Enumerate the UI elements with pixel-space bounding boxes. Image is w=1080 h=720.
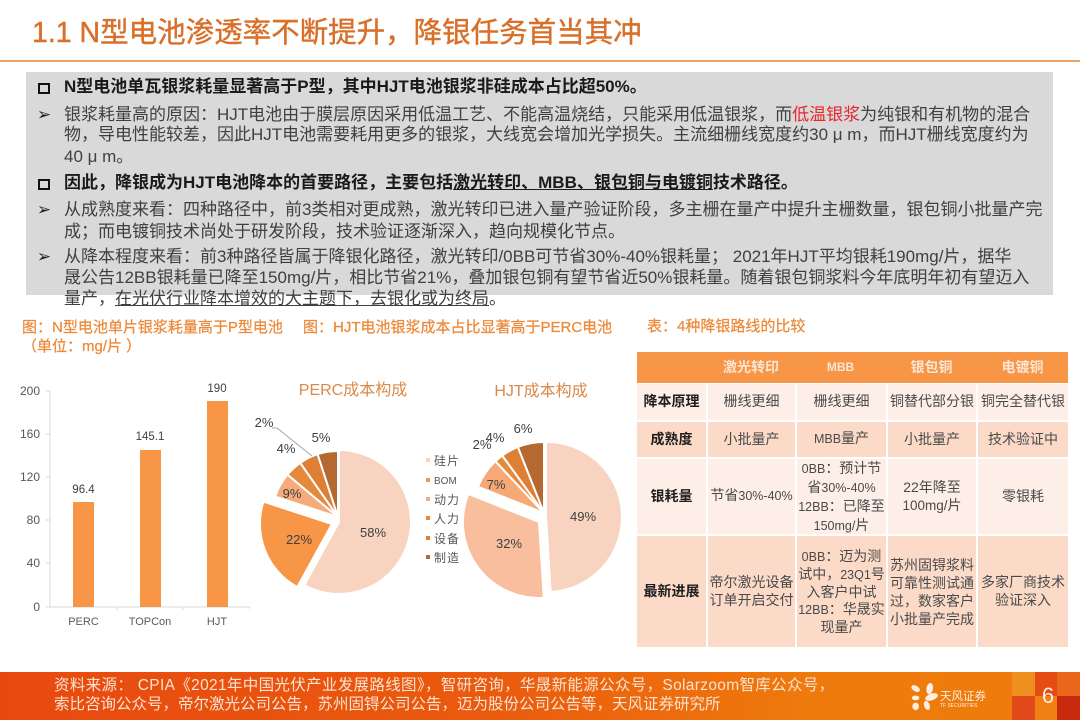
row: maturity: MBB量产: [814, 430, 869, 446]
footer source text: [54, 676, 834, 712]
row: maturity: 小批量产: [724, 431, 780, 447]
bar chart: silver paste per cell: 80: [27, 513, 40, 527]
pie legend: 动力: [434, 493, 460, 507]
key points text: 从成熟度来看：四种路径中，前3类相对更成熟，激光转印已进入量产验证阶段，多主栅在量产中提升主栅数量，银包铜小批量产完: [64, 200, 1042, 219]
row: latest progress: 帝尔激光设备: [710, 574, 794, 590]
footer band: [0, 672, 1080, 720]
bar chart: silver paste per cell: 120: [20, 470, 40, 484]
key points text: 银浆耗量高的原因：HJT电池由于膜层原因采用低温工艺、不能高温烧结，只能采用低温银浆，而低温银浆为纯银和有机物的混合: [64, 105, 1030, 124]
pie chart: PERC cost structure: 22%: [286, 532, 312, 547]
row: silver consumption: 22年降至: [903, 479, 961, 495]
pie chart: PERC cost structure: 5%: [312, 430, 331, 445]
key points text: ➢: [37, 200, 51, 219]
bar chart: silver paste per cell: 160: [20, 427, 40, 441]
bar chart: silver paste per cell: 190: [207, 383, 227, 395]
pie chart: HJT cost structure: 2%: [473, 437, 492, 452]
table header: [637, 352, 1068, 383]
title rule: [0, 60, 1080, 62]
logo: TF Securities: [911, 683, 986, 710]
row: maturity: 成熟度: [650, 431, 692, 447]
pie chart: PERC cost structure: 2%: [255, 415, 274, 430]
footer colour blocks: [1012, 672, 1080, 720]
caption: silver paste consumption: [22, 319, 283, 355]
row: silver consumption: 节省30%-40%: [710, 487, 793, 503]
caption: silver paste consumption: （单位：mg/片 ）: [22, 338, 141, 355]
row: principle: 栅线更细: [814, 393, 870, 409]
pie chart: HJT cost structure: HJT成本构成: [494, 382, 588, 400]
logo: TF Securities: 天风证券: [940, 691, 986, 703]
bar chart: silver paste per cell: 145.1: [136, 431, 164, 443]
bar chart: silver paste per cell: 96.4: [72, 484, 95, 496]
pie chart: HJT cost structure: 6%: [514, 421, 533, 436]
row: silver consumption: 12BB：已降至: [798, 498, 885, 514]
row: latest progress: 过，数家客户: [890, 592, 974, 608]
row: silver consumption: 零银耗: [1002, 488, 1044, 504]
caption: comparison table: 表：4种降银路线的比较: [647, 318, 805, 335]
row: principle: [637, 384, 1068, 420]
bar chart: silver paste per cell: [20, 383, 250, 628]
row: silver consumption: [637, 459, 1068, 534]
row: silver consumption: 0BB：预计节: [802, 460, 881, 476]
row: silver consumption: 150mg/片: [814, 516, 869, 532]
bar chart: silver paste per cell: TOPCon: [129, 616, 171, 628]
bar chart: silver paste per cell: HJT: [207, 616, 227, 628]
row: maturity: [637, 422, 1068, 457]
key points text: 晟公告12BB银耗量已降至150mg/片，相比节省21%，叠加银包铜有望节省近50%银耗量。随着银包铜浆料今年底明年初有望迈入: [64, 268, 1029, 287]
panel: key points: [26, 72, 1053, 295]
pie chart: HJT cost structure: [464, 382, 621, 597]
pie legend: 人力: [434, 512, 460, 526]
key points text: 因此，降银成为HJT电池降本的首要路径，主要包括激光转印、MBB、银包铜与电镀铜技术路径。: [64, 173, 798, 192]
pie chart: HJT cost structure: 7%: [487, 477, 506, 492]
row: latest progress: [637, 536, 1068, 647]
row: latest progress: 订单开启交付: [710, 592, 794, 608]
row: latest progress: 可靠性测试通: [890, 574, 974, 590]
pie legend: 硅片: [434, 454, 460, 468]
row: silver consumption: 省30%-40%: [807, 478, 876, 494]
key points text: ➢: [37, 247, 51, 266]
pie legend: [426, 454, 460, 565]
pie chart: PERC cost structure: [255, 381, 410, 593]
footer source text: 资料来源： CPIA《2021年中国光伏产业发展路线图》，智研咨询，华晟新能源公众号，Solarzoom智库公众号，: [54, 677, 834, 694]
row: latest progress: 12BB：华晟实: [798, 600, 885, 616]
page number: 6: [1042, 683, 1054, 708]
row: latest progress: 小批量产完成: [890, 610, 974, 626]
pie legend: 设备: [434, 532, 460, 546]
row: latest progress: 多家厂商技术: [981, 574, 1065, 590]
key points text: ➢: [37, 105, 51, 124]
row: latest progress: 验证深入: [995, 592, 1051, 608]
pie legend: 制造: [434, 551, 460, 565]
row: principle: 降本原理: [644, 393, 700, 409]
pie chart: PERC cost structure: PERC成本构成: [299, 381, 407, 399]
row: latest progress: 现量产: [820, 618, 862, 634]
table header: MBB: [827, 360, 854, 374]
table header: 银包铜: [910, 359, 952, 375]
row: latest progress: 最新进展: [644, 583, 700, 599]
table header: 激光转印: [723, 359, 779, 375]
pie legend: BOM: [434, 476, 457, 487]
bar chart: silver paste per cell: 40: [27, 556, 40, 570]
row: principle: 栅线更细: [724, 393, 780, 409]
key points text: [37, 77, 1042, 308]
pie chart: HJT cost structure: 4%: [486, 430, 505, 445]
key points text: 物，导电性能较差，因此HJT电池需要耗用更多的银浆，大线宽会增加光学损失。主流细栅线宽度约30 μ m，而HJT栅线宽度约为: [64, 125, 1029, 144]
bar chart: silver paste per cell: 0: [33, 600, 40, 614]
bar chart: silver paste per cell: PERC: [68, 616, 99, 628]
logo: TF Securities: TF SECURITIES: [940, 703, 978, 709]
table header: 电镀铜: [1002, 359, 1044, 375]
row: maturity: 技术验证中: [988, 431, 1058, 447]
footer source text: 索比咨询公众号，帝尔激光公司公告，苏州固锝公司公告，迈为股份公司公告等，天风证券研究所: [54, 696, 721, 712]
title: 1.1 N型电池渗透率不断提升，降银任务首当其冲: [32, 17, 642, 49]
pie chart: PERC cost structure: 9%: [283, 486, 302, 501]
pie chart: HJT cost structure: 49%: [570, 509, 596, 524]
row: latest progress: 入客户中试: [806, 584, 876, 600]
table: comparison of 4 silver reduction routes: [637, 352, 1068, 647]
row: principle: 铜完全替代银: [981, 393, 1065, 409]
bar chart: silver paste per cell: 200: [20, 384, 40, 398]
pie chart: PERC cost structure: 58%: [360, 525, 386, 540]
row: latest progress: 苏州固锝浆料: [890, 556, 974, 572]
row: latest progress: 试中，23Q1号: [798, 566, 885, 582]
row: maturity: 小批量产: [904, 431, 960, 447]
key points text: 成；而电镀铜技术尚处于研发阶段，技术验证逐渐深入，趋向规模化节点。: [64, 222, 625, 241]
pie chart: PERC cost structure: 4%: [277, 441, 296, 456]
key points text: N型电池单瓦银浆耗量显著高于P型，其中HJT电池银浆非硅成本占比超50%。: [64, 77, 647, 96]
caption: silver paste consumption: 图：N型电池单片银浆耗量高于P型电池: [22, 319, 283, 336]
caption: silver paste cost share: 图：HJT电池银浆成本占比显著高于PERC电池: [303, 319, 612, 336]
key points text: 量产，在光伏行业降本增效的大主题下，去银化或为终局。: [64, 289, 506, 308]
row: silver consumption: 银耗量: [650, 488, 692, 504]
row: latest progress: 0BB：迈为测: [802, 548, 881, 564]
row: principle: 铜替代部分银: [890, 393, 974, 409]
key points text: 从降本程度来看：前3种路径皆属于降银化路径，激光转印/0BB可节省30%-40%银耗量； 2021年HJT平均银耗190mg/片，据华: [64, 247, 1011, 266]
key points text: 40 μ m。: [64, 147, 133, 166]
row: silver consumption: 100mg/片: [902, 496, 962, 512]
pie chart: HJT cost structure: 32%: [496, 536, 522, 551]
